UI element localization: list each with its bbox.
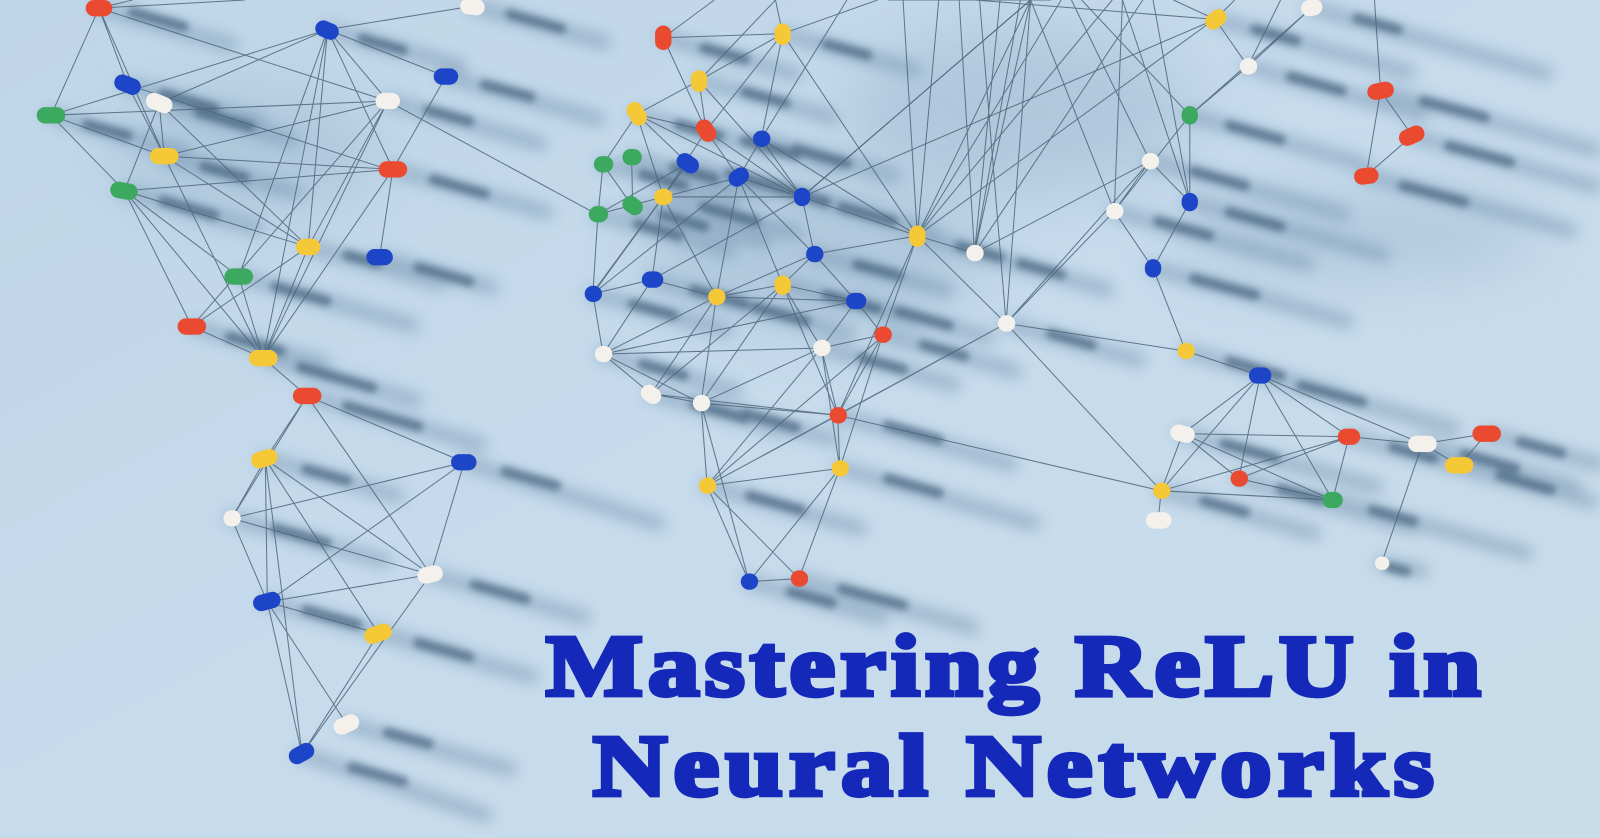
title line 2: Neural Networks xyxy=(593,717,1434,814)
strings: top hub and right cluster xyxy=(802,0,1487,563)
pins: right cluster xyxy=(1114,7,1493,563)
strings: left cluster xyxy=(51,0,597,396)
soft string shadow haze xyxy=(112,31,1541,327)
pins: centre cluster xyxy=(593,32,1007,582)
strings: lower left cluster xyxy=(232,396,464,754)
pins: left cluster xyxy=(45,6,477,358)
title line 1: Mastering ReLU in xyxy=(546,617,1481,714)
strings: centre cluster xyxy=(592,0,1215,582)
pins: lower left cluster xyxy=(232,396,468,756)
title xyxy=(546,617,1481,814)
